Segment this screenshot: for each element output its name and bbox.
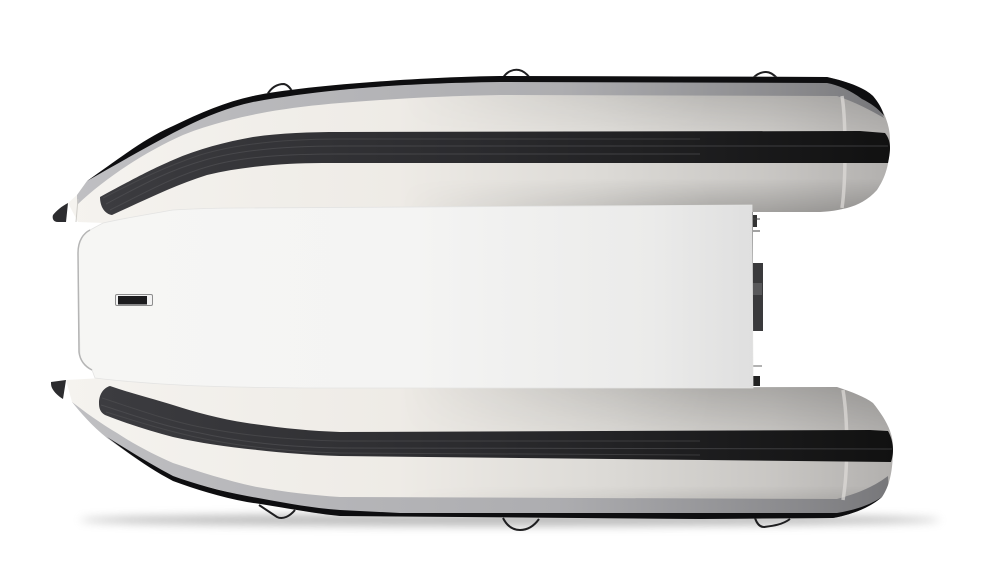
upper tube black rim xyxy=(87,76,884,181)
upper tube seam xyxy=(842,96,845,208)
ground shadow xyxy=(80,514,940,526)
deck left edge xyxy=(78,230,92,370)
lower tube seam xyxy=(843,390,847,500)
illustration: inflatable boat seen from above xyxy=(51,68,936,531)
deck floor panel xyxy=(78,205,753,388)
lower tube black rim xyxy=(107,437,882,519)
lower tube gray band xyxy=(60,402,890,520)
upper nose cap xyxy=(53,203,68,222)
upper tube shading xyxy=(467,77,884,212)
nose seam xyxy=(76,199,78,222)
lower nose cap xyxy=(51,380,66,399)
lower tube xyxy=(60,378,900,520)
upper carry handles xyxy=(267,70,777,95)
deck handle xyxy=(116,294,152,306)
upper rubber strake xyxy=(100,131,890,215)
transom and motor bracket xyxy=(750,205,763,388)
lower tube shading xyxy=(468,387,887,499)
lower carry handles xyxy=(259,505,790,530)
upper tube gray band xyxy=(77,76,884,205)
lower rubber strake xyxy=(99,386,893,462)
upper tube xyxy=(68,76,900,223)
